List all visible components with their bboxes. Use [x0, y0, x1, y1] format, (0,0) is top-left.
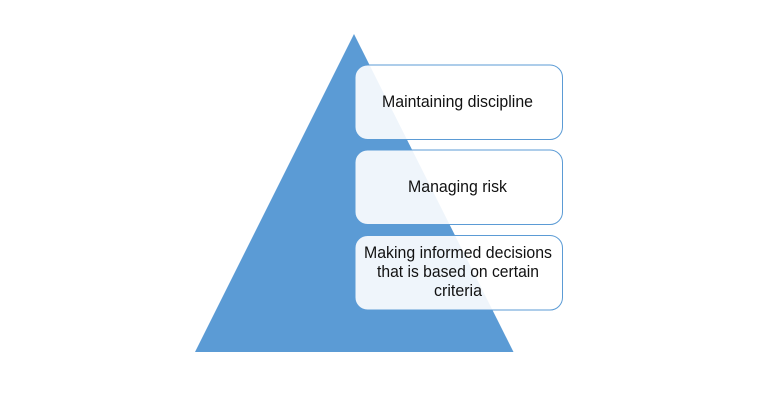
- panel: making informed decisions: criteria: [434, 282, 483, 300]
- panel: making informed decisions: [355, 236, 562, 310]
- pyramid triangle: [195, 34, 514, 352]
- panel: maintaining discipline: [355, 65, 562, 140]
- panel: making informed decisions: Making informed decisions: [364, 244, 552, 262]
- panel: maintaining discipline: Maintaining discipline: [382, 93, 533, 111]
- panel: making informed decisions: that is based on certain: [377, 263, 539, 281]
- panel: managing risk: Managing risk: [408, 178, 508, 196]
- panel: managing risk: [355, 150, 562, 224]
